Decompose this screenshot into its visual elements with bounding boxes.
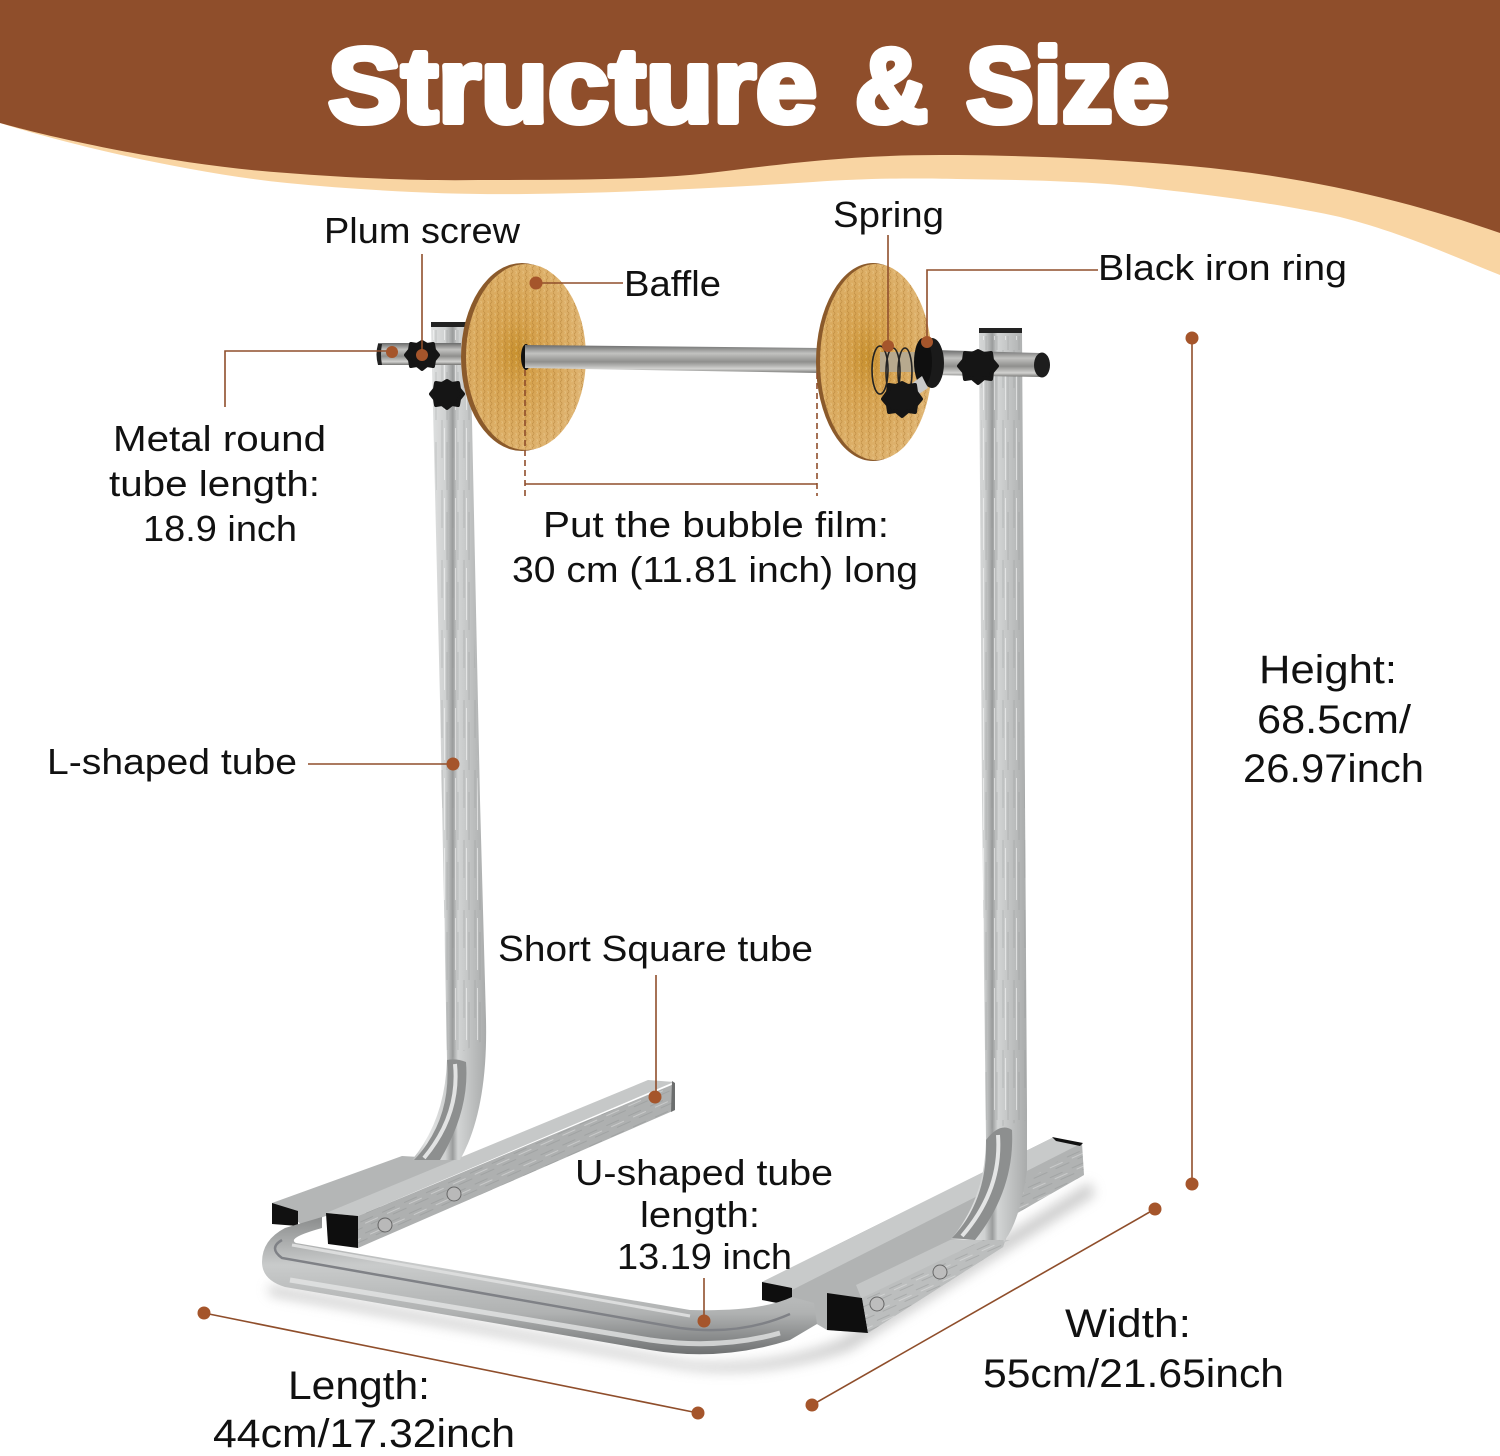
dimension: width [806,1202,1284,1412]
label: plum screw [324,210,521,361]
label: baffle: Baffle [624,263,721,304]
plum screw knobs [406,342,997,416]
product: bubble film stand [262,263,1095,1371]
label: U-shaped tube length: U-shaped tube [575,1152,833,1193]
right baffle [816,263,932,461]
label: U-shaped tube length: length: [640,1194,760,1235]
label: black iron ring [921,247,1347,348]
black iron ring [910,338,944,396]
dimension: length: Length: [288,1364,430,1408]
label: spring [833,194,944,352]
left baffle [461,263,586,451]
label: plum screw: Plum screw [324,210,521,251]
dimension: bubble film length: Put the bubble film: [543,504,889,545]
dimension: bubble film length [512,370,918,590]
header banner [0,0,1500,275]
right L-shaped post [950,328,1027,1240]
dimension: height [1186,332,1424,1190]
label: short square tube: Short Square tube [498,928,813,969]
dimension: width: Width: [1065,1302,1191,1346]
title: Structure [328,27,817,145]
label: black iron ring: Black iron ring [1098,247,1347,288]
dimension: width: 55cm/21.65inch [983,1352,1284,1396]
ground shadow [268,1182,1095,1371]
label: metal round tube length: tube length: [109,463,320,504]
label: baffle [530,263,721,304]
U-shaped base tube [262,1217,817,1354]
title: Size [966,27,1169,145]
right foot tube [762,1137,1084,1333]
label: short square tube [498,928,813,1104]
banner brown wave [0,0,1500,233]
label: metal round tube length: 18.9 inch [143,508,297,549]
title [328,27,1169,145]
label: metal round tube length [109,346,398,549]
dimension: length [198,1306,704,1456]
title: & [855,27,928,145]
label: U-shaped tube length: 13.19 inch [617,1236,792,1277]
dimension: height: 68.5cm/ [1257,698,1412,742]
spring [872,346,930,396]
metal round tube [376,343,1050,378]
dimension: height: 26.97inch [1243,747,1424,791]
dimension: length: 44cm/17.32inch [213,1412,515,1456]
label: L-shaped tube [47,741,460,782]
dimension: bubble film length: 30 cm (11.81 inch) long [512,549,918,590]
left L-shaped post [412,322,486,1160]
dimension: height: Height: [1259,648,1397,692]
left foot tube [272,1080,675,1248]
label: L-shaped tube: L-shaped tube [47,741,297,782]
label: metal round tube length: Metal round [113,418,326,459]
label: spring: Spring [833,194,944,235]
banner cream wave [0,0,1500,275]
label: U-shaped tube length [575,1152,833,1328]
